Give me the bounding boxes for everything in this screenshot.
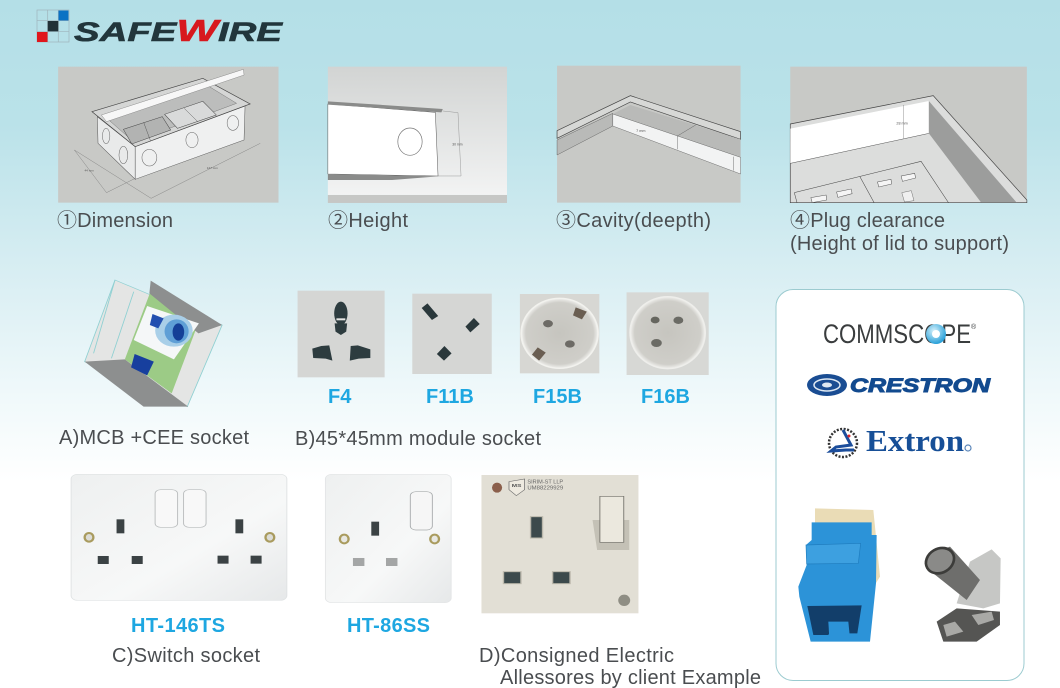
caption: module socket: B)45*45mm module socket: [295, 428, 541, 450]
caption: plug clearance: ④Plug clearance: [790, 209, 945, 232]
caption: cavity: ③Cavity(deepth): [556, 209, 711, 232]
caption: consigned accessories: [479, 645, 761, 688]
icon: logo checker grid: [37, 10, 69, 42]
logo: SafeWire: [37, 10, 283, 48]
model labels: HT-146TS: [131, 615, 225, 637]
panel: 1 dimension drawing: 127 mm: [207, 166, 218, 170]
socket: consigned client example: UM88229929: [527, 486, 564, 491]
socket: consigned client example: [481, 475, 638, 613]
panel: 1 dimension drawing: 44 mm: [84, 168, 94, 172]
logo: CommScope: ®: [971, 323, 977, 331]
module labels: F11B: [426, 386, 474, 408]
icon: metal coax connector: [921, 543, 1001, 642]
logo: Extron: Extron: [866, 423, 964, 458]
panel: partner brands and connectors: [776, 290, 1024, 680]
socket: HT-146TS double switch socket: [71, 474, 287, 600]
module labels: F16B: [641, 386, 690, 408]
caption: switch socket: C)Switch socket: [112, 645, 260, 667]
socket: F4: [298, 291, 385, 377]
illustration: MCB and CEE socket box: [85, 280, 222, 407]
logo: Extron: [829, 423, 971, 458]
panel: 3 cavity drawing: 7 mm: [636, 129, 645, 133]
socket: HT-86SS single switch socket: [325, 474, 451, 603]
module labels: F4: [328, 386, 352, 408]
caption: MCB + CEE: A)MCB +CEE socket: [59, 427, 249, 449]
panel: 4 plug clearance drawing: 28 mm: [896, 122, 908, 126]
socket: consigned client example: MS: [512, 484, 522, 489]
model labels: [131, 615, 430, 637]
logo wordmark: SAFE W IRE: [74, 13, 283, 48]
panel: 2 height drawing: 30 mm: [452, 143, 463, 147]
caption: consigned accessories: D)Consigned Electric: [479, 645, 674, 667]
module labels: [328, 386, 690, 408]
socket: consigned client example: SIRIM-ST LLP: [527, 480, 563, 485]
panel: 2 height drawing: [328, 67, 507, 203]
panel: 3 cavity drawing: [557, 66, 741, 203]
socket: F11B: [412, 294, 492, 374]
icon: blue RJ45 keystone jack: [798, 508, 880, 642]
logo: Crestron: CRESTRON: [850, 376, 992, 397]
model labels: HT-86SS: [347, 615, 430, 637]
panel: 4 plug clearance drawing: [790, 67, 1027, 203]
caption: height: ②Height: [328, 209, 408, 232]
caption: plug clearance: [790, 209, 1009, 255]
caption: plug clearance: (Height of lid to support): [790, 233, 1009, 255]
caption: dimension: ①Dimension: [57, 209, 173, 232]
panel: 1 dimension drawing: [58, 67, 279, 203]
socket: F15B: [520, 294, 599, 373]
module labels: F15B: [533, 386, 582, 408]
socket: F16B: [627, 292, 709, 375]
logo: CommScope: COMMSCOPE: [823, 319, 971, 349]
logo: Crestron: [807, 374, 992, 397]
